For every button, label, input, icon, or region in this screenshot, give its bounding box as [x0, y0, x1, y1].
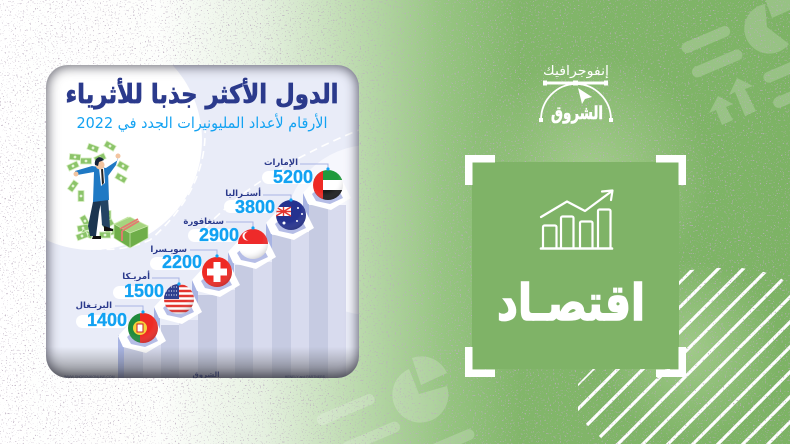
label: Australia: 3800 — [235, 197, 275, 217]
panel vignette — [46, 349, 359, 378]
diagonal stripes — [578, 268, 790, 444]
label: Portugal: البرتـغال — [76, 301, 112, 311]
flag: Portugal — [128, 313, 158, 343]
label: USA: 1500 — [124, 281, 164, 301]
label: Australia — [224, 188, 293, 214]
label: UAE: الإمارات — [264, 158, 298, 168]
logo — [539, 64, 613, 124]
icon: rising bar chart — [541, 190, 612, 248]
flag: Switzerland — [202, 257, 232, 287]
label: UAE — [262, 158, 330, 184]
label: Switzerland — [150, 245, 219, 272]
frame corners — [465, 155, 686, 377]
footer credits: WWW.SHOROUKONLINE.COM — [64, 375, 115, 379]
flag: Australia — [276, 200, 306, 230]
label: Switzerland: 2200 — [162, 252, 202, 272]
category label: اقتصـاد — [497, 274, 645, 332]
illustration: man with money — [67, 141, 148, 248]
label: Portugal — [76, 301, 145, 330]
label: Singapore: 2900 — [199, 225, 239, 245]
flag: UAE — [313, 170, 343, 200]
footer credits: HENELY and PARTNERS — [285, 375, 326, 379]
logo: الشروق — [551, 103, 603, 124]
flag: Singapore — [238, 229, 268, 259]
category box — [472, 162, 679, 369]
white circle backdrop — [46, 65, 202, 250]
footer credits: الشروق — [192, 371, 220, 379]
infographic panel — [46, 65, 359, 378]
footer credits — [64, 372, 325, 378]
decorative icons bottom — [315, 356, 476, 444]
label: Switzerland: سويـسرا — [150, 245, 187, 255]
title: الدول الأكثر جذبا للأثرياء — [66, 78, 338, 110]
decorative icons top right — [680, 0, 790, 125]
label: Australia: أستـراليا — [225, 187, 261, 199]
platforms — [118, 180, 351, 353]
label: Portugal: 1400 — [87, 310, 127, 330]
label: UAE: 5200 — [273, 167, 313, 187]
label: USA — [113, 270, 181, 301]
label: Singapore: سنغافورة — [183, 217, 224, 227]
flag: USA — [164, 284, 194, 314]
label: Singapore — [184, 218, 255, 242]
subtitle: الأرقام لأعداد المليونيرات الجدد في 2022 — [76, 113, 328, 133]
logo: إنفوجرافيك — [543, 64, 609, 79]
label: USA: أمريـكا — [122, 270, 150, 282]
stair columns — [118, 193, 346, 380]
